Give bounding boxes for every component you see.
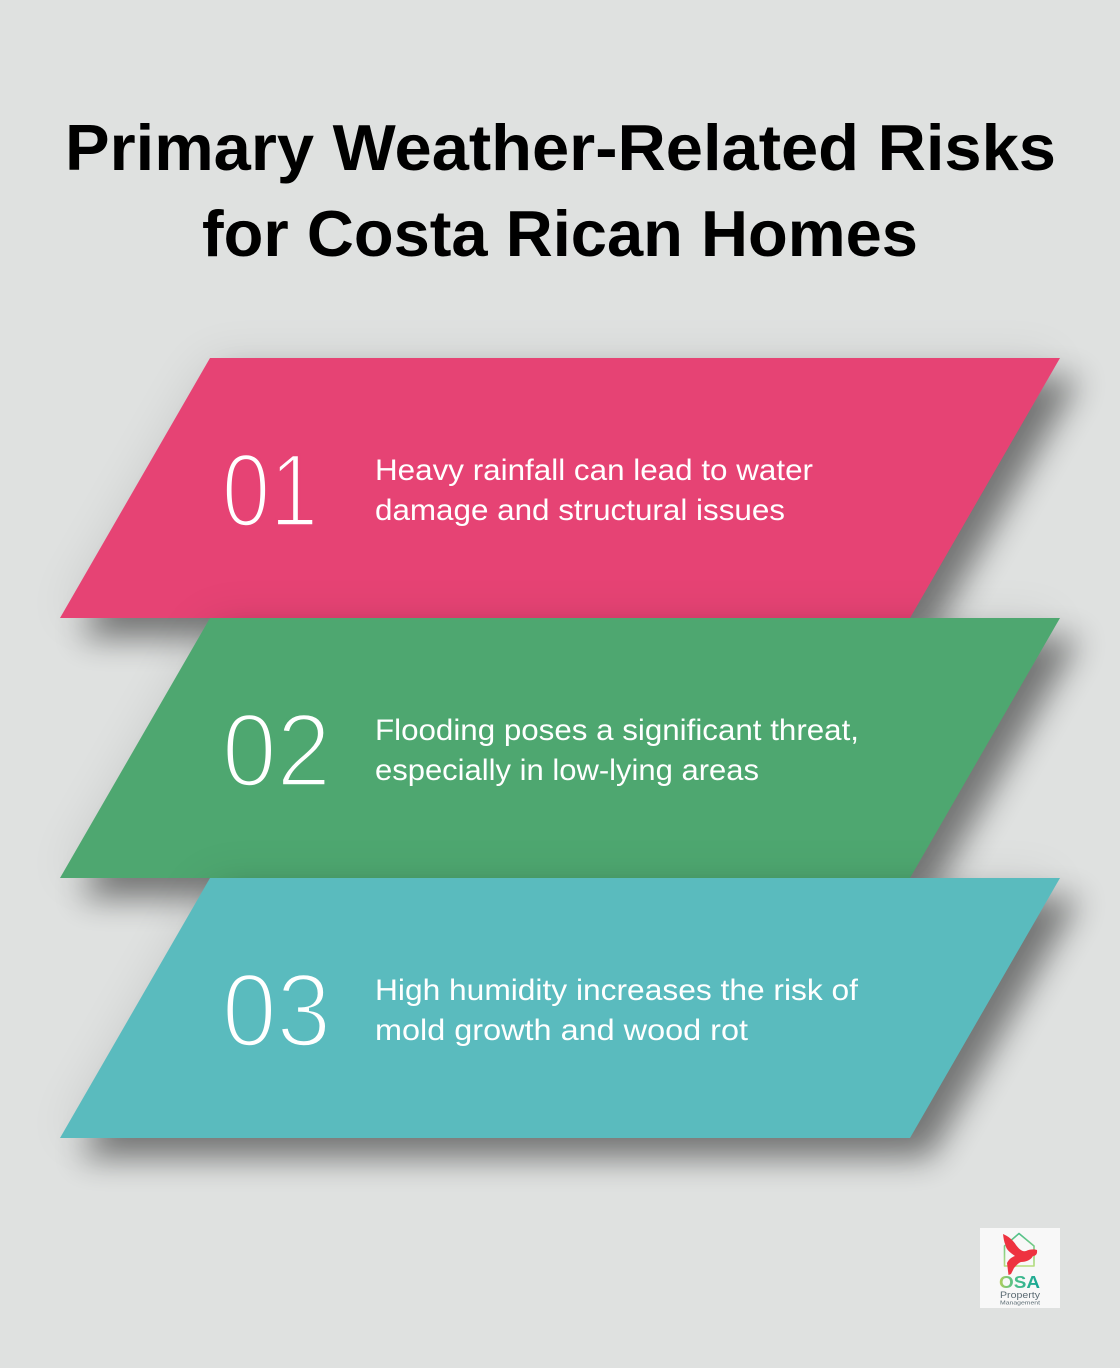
- panel: risk 02 background: [60, 618, 1060, 878]
- icon: house outline: [1004, 1234, 1034, 1266]
- risk 02 text: Flooding poses a significant threat,: [375, 714, 859, 747]
- risk 03 text: High humidity increases the risk of: [375, 974, 859, 1007]
- panel: risk 03 background: [60, 878, 1060, 1138]
- risk 02 text: especially in low-lying areas: [375, 754, 759, 787]
- panel: risk 01 background: [60, 358, 1060, 618]
- title: for Costa Rican Homes: [202, 197, 918, 270]
- risk 01 number: 01: [222, 433, 318, 549]
- risk 01 text: [375, 454, 813, 527]
- risk 03 text: [375, 974, 859, 1047]
- logo wordmark: OSA: [999, 1272, 1040, 1292]
- title: Primary Weather-Related Risks: [65, 111, 1056, 184]
- logo tagline: Management: [1000, 1300, 1041, 1306]
- logo tagline: [1000, 1290, 1041, 1306]
- title: [65, 111, 1056, 270]
- logo: OSA Property Management: [980, 1228, 1060, 1308]
- logo tagline: Property: [1000, 1290, 1041, 1300]
- risk 01 text: Heavy rainfall can lead to water: [375, 454, 813, 487]
- risk 03 text: mold growth and wood rot: [375, 1014, 748, 1047]
- risk 03 number: 03: [222, 953, 331, 1069]
- risk 01 text: damage and structural issues: [375, 494, 785, 527]
- risk 02 number: 02: [222, 693, 331, 809]
- icon: red bird: [1003, 1234, 1037, 1275]
- risk 02 text: [375, 714, 859, 787]
